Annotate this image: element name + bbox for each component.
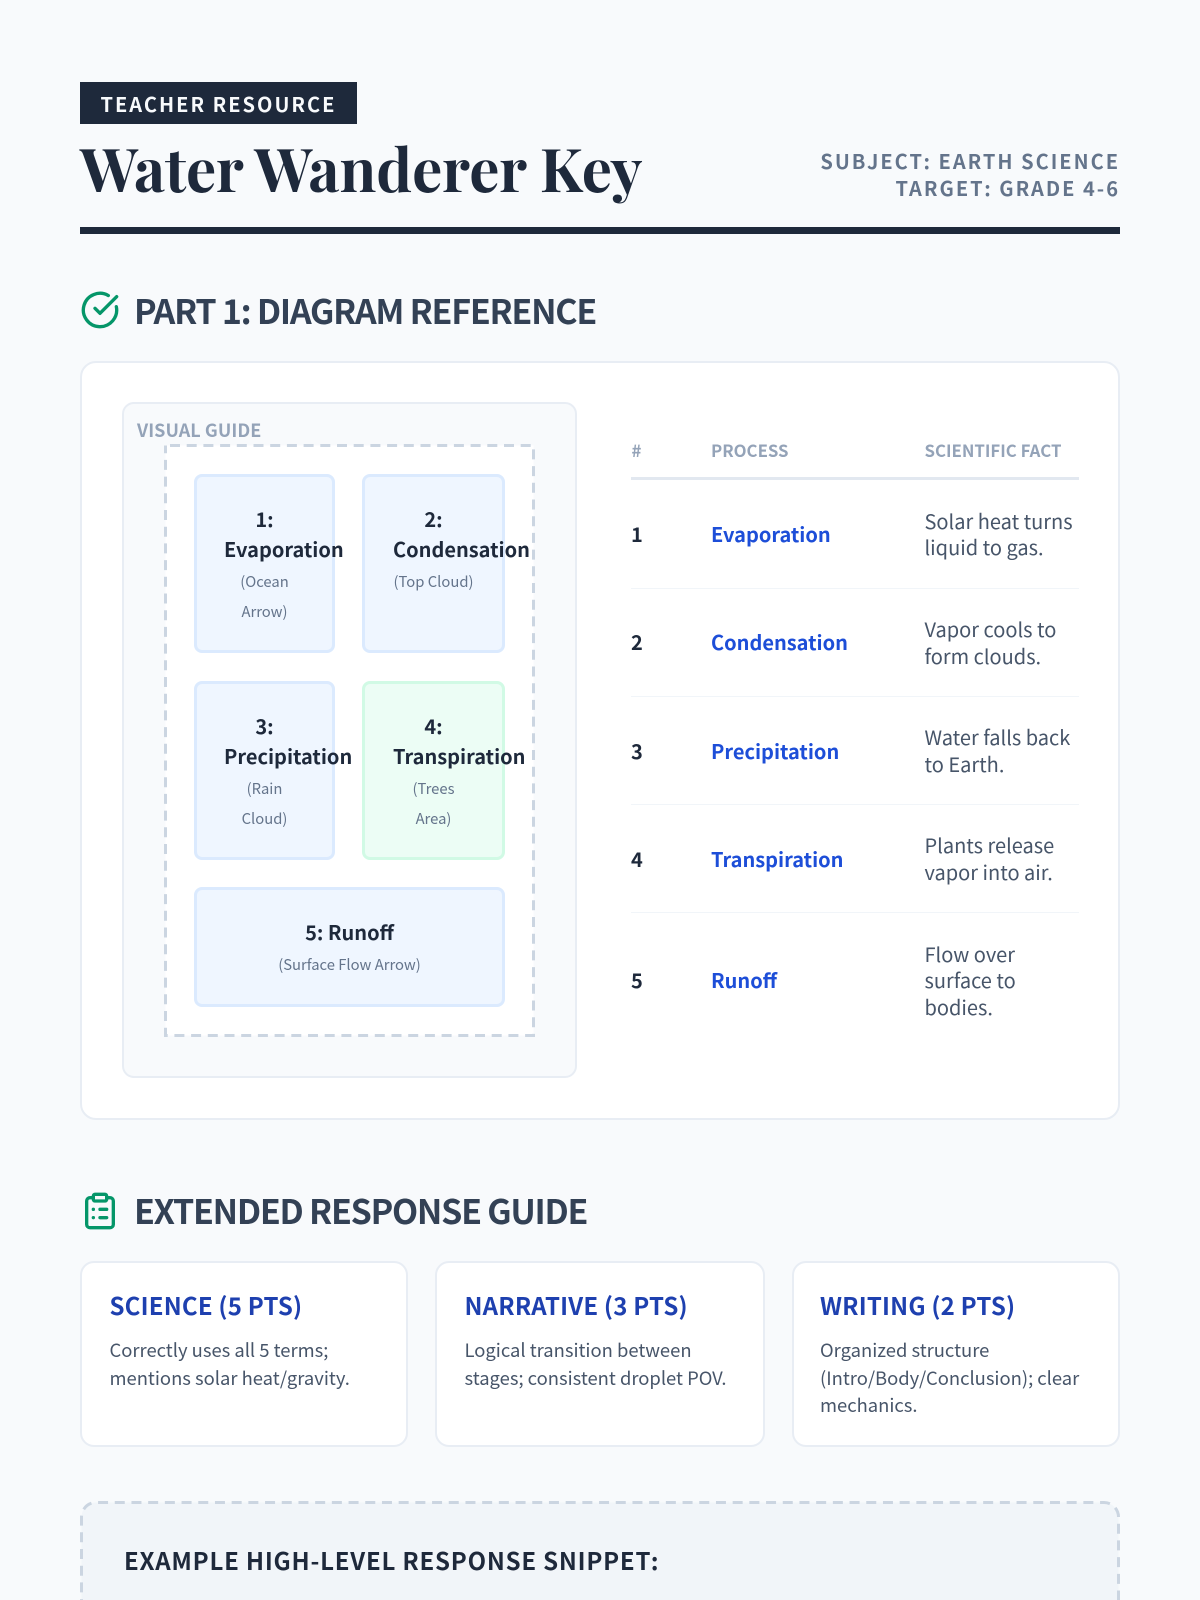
panel: visual guide (122, 402, 577, 1078)
row 3 (631, 722, 1079, 805)
card: narrative (435, 1261, 764, 1447)
row 2: Condensation (711, 627, 848, 656)
row 3: Precipitation (711, 736, 839, 765)
row 1: liquid to gas. (924, 532, 1044, 561)
box 2 (362, 474, 530, 653)
diagram area dashed (164, 444, 535, 1037)
row 1: 1 (631, 519, 643, 548)
row 5: bodies. (924, 992, 993, 1021)
table header (631, 438, 1079, 480)
card: writing: WRITING (2 PTS) (820, 1287, 1015, 1322)
heading: part 1: PART 1: DIAGRAM REFERENCE (134, 285, 596, 334)
heading: example snippet: EXAMPLE HIGH-LEVEL RESPONSE SNIPPET: (124, 1542, 659, 1577)
box 4 (362, 681, 526, 860)
row 4 (631, 830, 1079, 913)
table (631, 438, 1079, 1021)
card: writing: (Intro/Body/Conclusion); clear (820, 1365, 1079, 1391)
card: narrative: stages; consistent droplet POV. (464, 1365, 727, 1391)
card: science (80, 1261, 408, 1447)
row 1 (631, 506, 1079, 589)
icon: check circle (82, 292, 118, 328)
box 2: (Top Cloud) (394, 571, 474, 592)
heading: extended response guide: EXTENDED RESPONSE GUIDE (134, 1185, 587, 1234)
panel: diagram reference (80, 361, 1120, 1120)
row 3: 3 (631, 736, 643, 765)
row 5: surface to (924, 965, 1016, 994)
row 1: Evaporation (711, 519, 831, 548)
box 3: Cloud) (242, 808, 287, 829)
box 5: 5: Runoff (305, 917, 394, 946)
row 2 (631, 614, 1079, 697)
card: science: Correctly uses all 5 terms; (110, 1337, 328, 1363)
card: narrative: Logical transition between (464, 1337, 692, 1363)
row 2: 2 (631, 627, 643, 656)
row 2: Vapor cools to (924, 614, 1056, 643)
box 3 (194, 681, 352, 860)
table header: # (632, 438, 641, 462)
meta: subject and target: SUBJECT: EARTH SCIENCE (820, 146, 1120, 175)
box 1: Evaporation (224, 534, 344, 563)
box 2: Condensation (393, 534, 530, 563)
card: writing (792, 1261, 1120, 1447)
row 4: vapor into air. (924, 857, 1053, 886)
box 3: Precipitation (224, 741, 352, 770)
badge: teacher resource (80, 82, 357, 124)
badge: teacher resource: TEACHER RESOURCE (100, 89, 336, 118)
box 2: 2: (424, 504, 443, 533)
box 3: (Rain (247, 778, 282, 799)
box 1 (194, 474, 344, 653)
row 5 (631, 939, 1016, 1021)
card: writing: mechanics. (820, 1392, 918, 1418)
card: science: SCIENCE (5 PTS) (110, 1287, 302, 1322)
box 4: 4: (424, 711, 443, 740)
box 4: Transpiration (393, 741, 526, 770)
row 4: Plants release (924, 830, 1054, 859)
box 5 (194, 887, 505, 1007)
meta: subject and target (820, 146, 1120, 202)
label: visual guide: VISUAL GUIDE (137, 417, 261, 443)
box 3: 3: (255, 711, 274, 740)
icon: clipboard list (85, 1192, 115, 1230)
card: science: mentions solar heat/gravity. (110, 1365, 350, 1391)
row 4: Transpiration (711, 844, 844, 873)
row 5: 5 (631, 965, 643, 994)
table header: SCIENTIFIC FACT (924, 438, 1061, 462)
row 3: Water falls back (924, 722, 1070, 751)
box 5: (Surface Flow Arrow) (278, 954, 421, 975)
row 5: Flow over (924, 939, 1015, 968)
box 1: (Ocean (240, 571, 289, 592)
card: writing: Organized structure (820, 1337, 989, 1363)
header rule (80, 227, 1120, 234)
card: narrative: NARRATIVE (3 PTS) (464, 1287, 688, 1322)
title: Water Wanderer Key (80, 128, 642, 208)
row 2: form clouds. (924, 641, 1041, 670)
box 4: (Trees (412, 778, 454, 799)
box 1: Arrow) (241, 601, 288, 622)
box 1: 1: (255, 504, 274, 533)
meta: subject and target: TARGET: GRADE 4-6 (895, 173, 1120, 202)
table header: PROCESS (711, 438, 789, 462)
box 4: Area) (416, 808, 451, 829)
row 4: 4 (631, 844, 643, 873)
row 3: to Earth. (924, 749, 1004, 778)
row 5: Runoff (711, 965, 777, 994)
panel: example snippet (80, 1501, 1120, 1600)
row 1: Solar heat turns (924, 506, 1073, 535)
